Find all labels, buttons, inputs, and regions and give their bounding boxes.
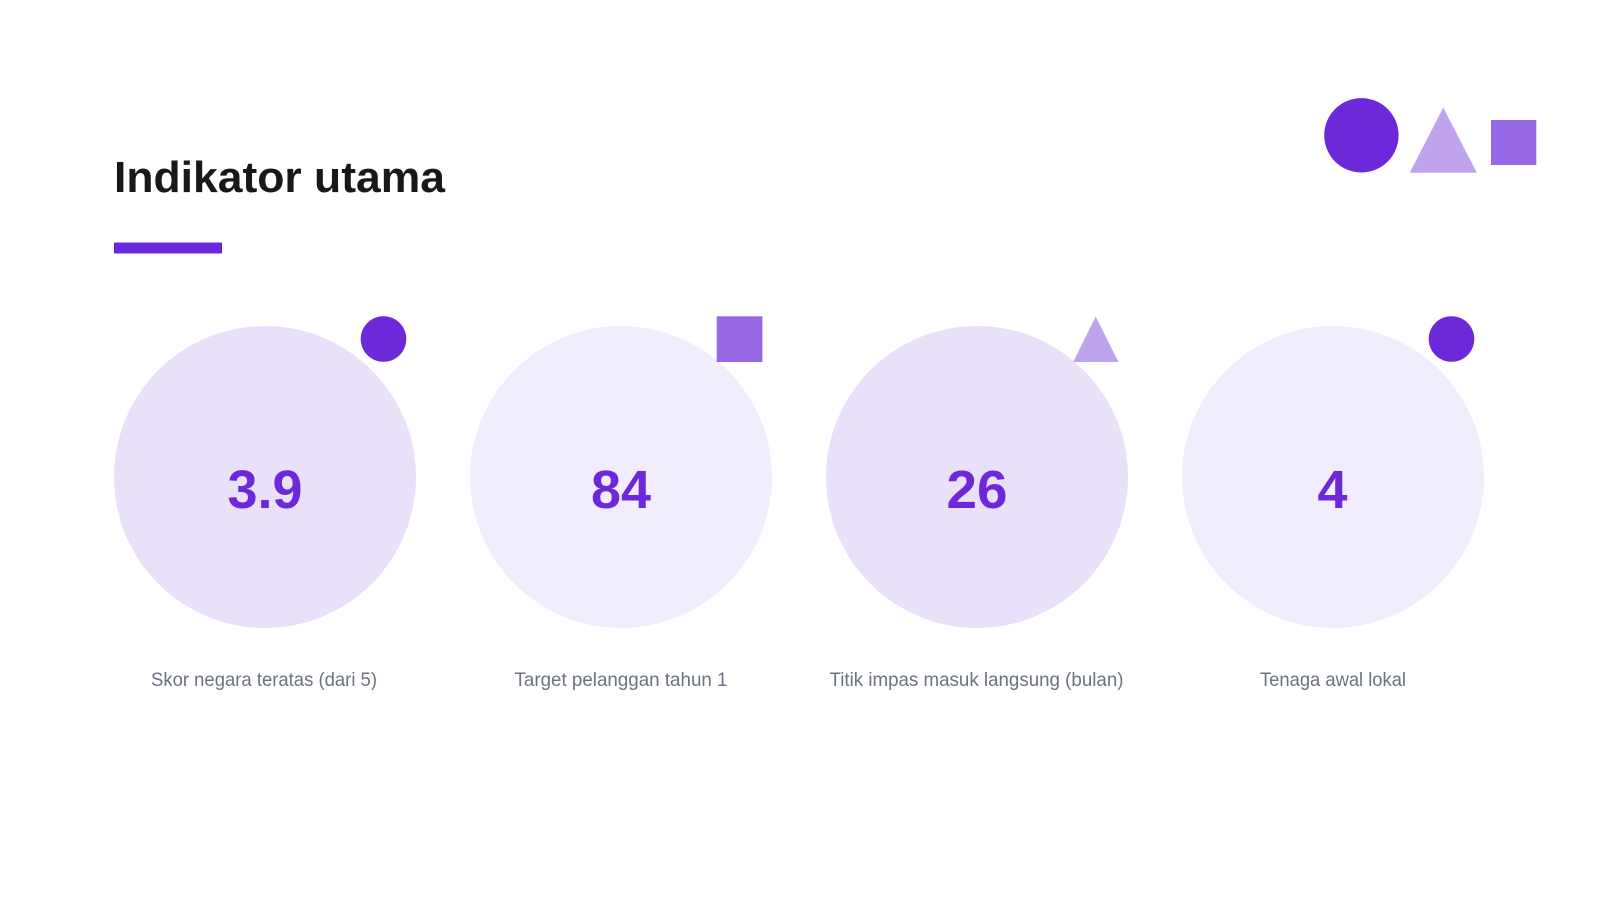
metric label: Target pelanggan tahun 1 — [514, 669, 728, 691]
icon: large square — [1491, 120, 1536, 165]
decorative shapes top right — [1324, 98, 1536, 173]
panel: skor negara — [114, 316, 416, 691]
metric value: 84 — [591, 460, 651, 520]
icon: square — [717, 316, 762, 362]
metric circle — [826, 326, 1128, 628]
metric circle — [470, 326, 772, 628]
panel: tenaga awal — [1182, 316, 1484, 691]
panel: titik impas — [826, 316, 1128, 691]
title: Indikator utama — [114, 153, 446, 202]
icon: large triangle — [1410, 108, 1477, 173]
icon: large circle — [1324, 98, 1399, 172]
metric value: 3.9 — [228, 460, 302, 520]
metric value: 26 — [946, 460, 1008, 520]
title accent bar — [114, 242, 222, 254]
icon: circle — [1429, 316, 1474, 362]
metric label: Skor negara teratas (dari 5) — [151, 669, 377, 691]
icon: circle — [361, 316, 406, 362]
metric label: Titik impas masuk langsung (bulan) — [830, 669, 1124, 691]
metric circle — [1182, 326, 1484, 628]
metric label: Tenaga awal lokal — [1260, 669, 1406, 691]
panel: target pelanggan — [470, 316, 772, 691]
metric circle — [114, 326, 416, 628]
icon: triangle — [1073, 316, 1118, 362]
metric value: 4 — [1318, 460, 1348, 520]
